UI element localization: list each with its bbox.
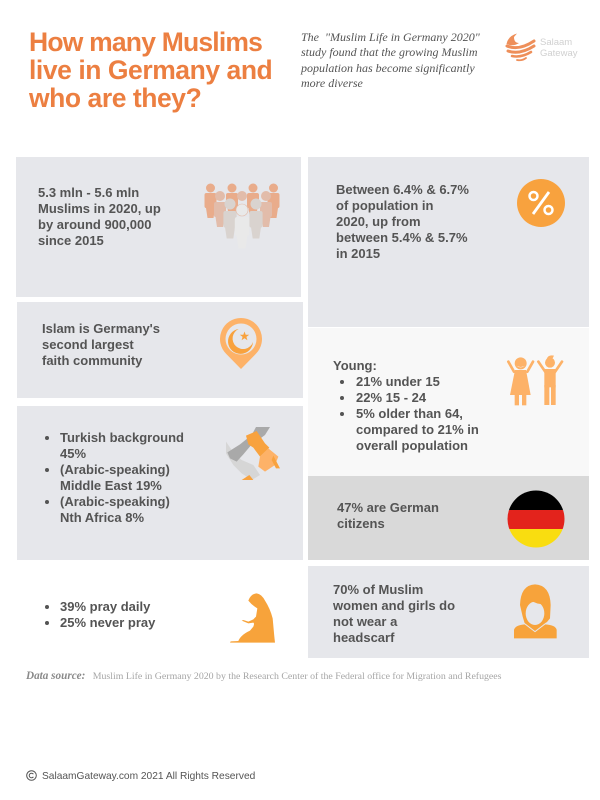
intro text: population has become significantly [301, 61, 475, 75]
text: German citizens: 47% are German [337, 500, 439, 515]
text: population count: 5.3 mln - 5.6 mln [38, 185, 139, 200]
text: headscarf statistic: headscarf [333, 630, 394, 645]
logo: Salaam Gateway: Gateway [540, 48, 578, 59]
text: second largest faith: Islam is Germany's [42, 321, 160, 336]
text: German citizens [337, 500, 439, 531]
text: percent of population [336, 182, 469, 261]
text: population count [38, 185, 161, 248]
panel: Muslim numbers [16, 157, 301, 297]
intro text [300, 30, 480, 90]
text: young demographics: compared to 21% in [356, 422, 479, 437]
list: origins: (Arabic-speaking) [60, 462, 170, 477]
text: population count: by around 900,000 [38, 217, 151, 232]
title: How many Muslims [29, 27, 262, 57]
intro text: more diverse [301, 76, 363, 90]
data source: Data source: Muslim Life in Germany 2020 by the Research Center of the Federal office for Migration and Refugees [26, 670, 502, 682]
icon: praying woman [230, 593, 275, 643]
title [28, 27, 272, 113]
text: German citizens: citizens [337, 516, 385, 531]
icon: copyright [26, 770, 37, 781]
icon: map pin with crescent [220, 318, 262, 369]
text: percent of population: Between 6.4% & 6.7% [336, 182, 469, 197]
text: percent of population: in 2015 [336, 246, 380, 261]
text: second largest faith: faith community [42, 353, 142, 368]
list: origins: Nth Africa 8% [60, 510, 144, 525]
text: percent of population: between 5.4% & 5.7% [336, 230, 468, 245]
icon: percent badge [517, 179, 565, 227]
panel: prayer [17, 566, 303, 658]
panel: young [308, 328, 589, 476]
title: who are they? [29, 83, 201, 113]
text: young demographics [333, 358, 479, 453]
list: origins: 45% [60, 446, 86, 461]
list: origins: Middle East 19% [60, 478, 162, 493]
panel: faith community [17, 302, 303, 398]
text: young demographics: Young: [333, 358, 377, 373]
list: prayer habits: 39% pray daily [60, 599, 150, 614]
intro text: study found that the growing Muslim [301, 45, 478, 59]
text: headscarf statistic [333, 582, 455, 645]
list: origins: Turkish background [60, 430, 184, 445]
list: origins: (Arabic-speaking) [60, 494, 170, 509]
text: young demographics: 22% 15 - 24 [356, 390, 426, 405]
text: headscarf statistic: 70% of Muslim [333, 582, 423, 597]
text: young demographics: 21% under 15 [356, 374, 440, 389]
panel: citizens [308, 476, 589, 560]
text: percent of population: of population in [336, 198, 433, 213]
title: live in Germany and [29, 55, 272, 85]
text: young demographics: overall population [356, 438, 468, 453]
footer copyright: SalaamGateway.com 2021 All Rights Reserved [42, 771, 255, 782]
text: young demographics: 5% older than 64, [356, 406, 463, 421]
icon: woman with headscarf [514, 584, 557, 638]
panel: percent of population [308, 157, 589, 327]
list: prayer habits [45, 599, 156, 630]
panel: headscarf [308, 566, 589, 658]
intro text: The "Muslim Life in Germany 2020" [301, 30, 480, 44]
list: origins [45, 430, 184, 525]
text: population count: Muslims in 2020, up [38, 201, 161, 216]
text: headscarf statistic: not wear a [333, 614, 397, 629]
logo: Salaam Gateway [506, 34, 578, 62]
icon: joined hands [226, 427, 280, 480]
list: prayer habits: 25% never pray [60, 615, 155, 630]
icon: two children [507, 355, 564, 406]
panel: background origins [17, 406, 303, 560]
text: headscarf statistic: women and girls do [333, 598, 455, 613]
text: second largest faith: second largest [42, 337, 134, 352]
icon: crowd of people [204, 184, 280, 238]
text: population count: since 2015 [38, 233, 104, 248]
text: percent of population: 2020, up from [336, 214, 421, 229]
text: second largest faith [42, 321, 160, 368]
logo: Salaam Gateway: Salaam [540, 37, 572, 48]
icon: German flag circle [508, 490, 564, 548]
